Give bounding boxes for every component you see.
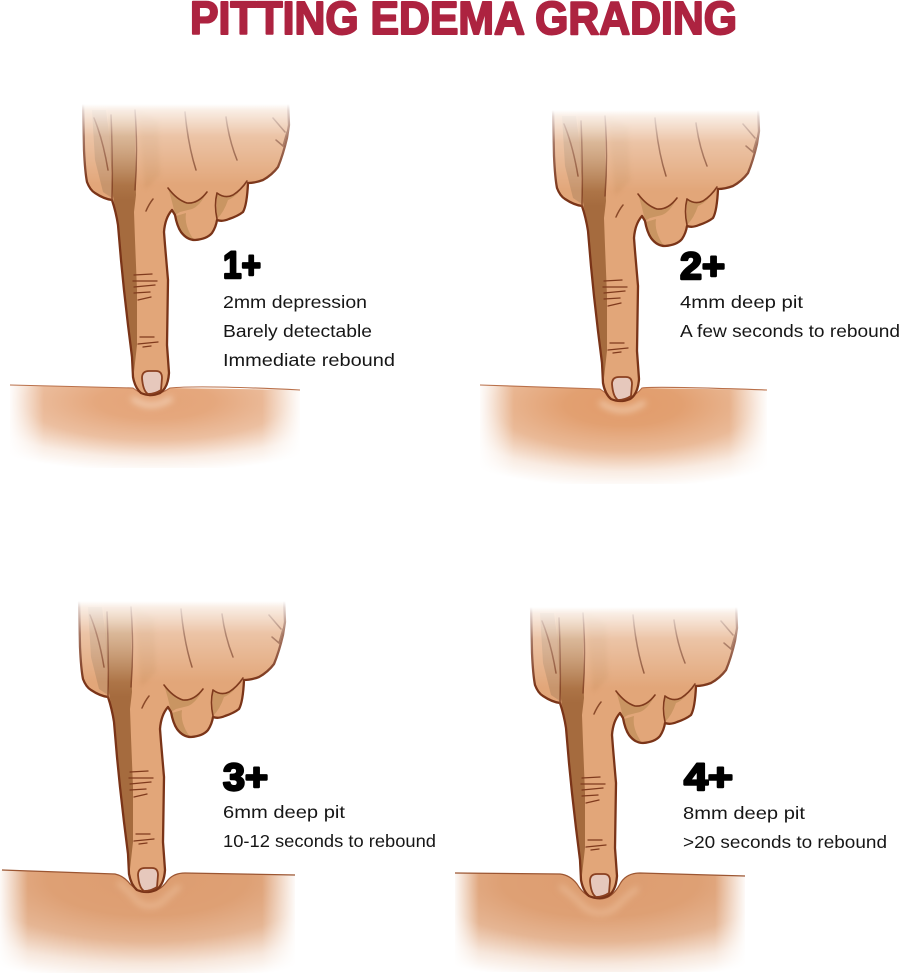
description (683, 803, 887, 852)
grade label: 4+ (684, 757, 733, 799)
description: 6mm deep pit (223, 802, 345, 822)
grade label: 1+ (223, 245, 261, 287)
description (680, 292, 900, 341)
description: Immediate rebound (223, 350, 395, 370)
icon: pressing hand (553, 106, 759, 401)
skin: 8mm pit (453, 872, 747, 976)
grade label: 3+ (223, 757, 268, 799)
description: Barely detectable (223, 321, 372, 341)
panel: grade 4+ (453, 603, 887, 976)
skin: shallow depression (8, 384, 302, 472)
description: 10-12 seconds to rebound (223, 831, 436, 851)
description: 8mm deep pit (683, 803, 805, 823)
grade label: 2+ (680, 246, 725, 288)
icon: pressing hand (83, 100, 289, 395)
description (223, 802, 436, 851)
panel: grade 2+ (478, 106, 900, 488)
description: 2mm depression (223, 292, 367, 312)
panel: grade 3+ (0, 597, 436, 977)
description: A few seconds to rebound (680, 321, 900, 341)
panel: grade 1+ (8, 100, 395, 472)
description: 4mm deep pit (680, 292, 803, 312)
skin: 4mm pit (478, 384, 769, 488)
skin: 6mm pit (0, 869, 297, 977)
icon: pressing hand (79, 597, 285, 892)
icon: pressing hand (531, 603, 737, 898)
description (223, 292, 395, 370)
description: >20 seconds to rebound (683, 832, 887, 852)
